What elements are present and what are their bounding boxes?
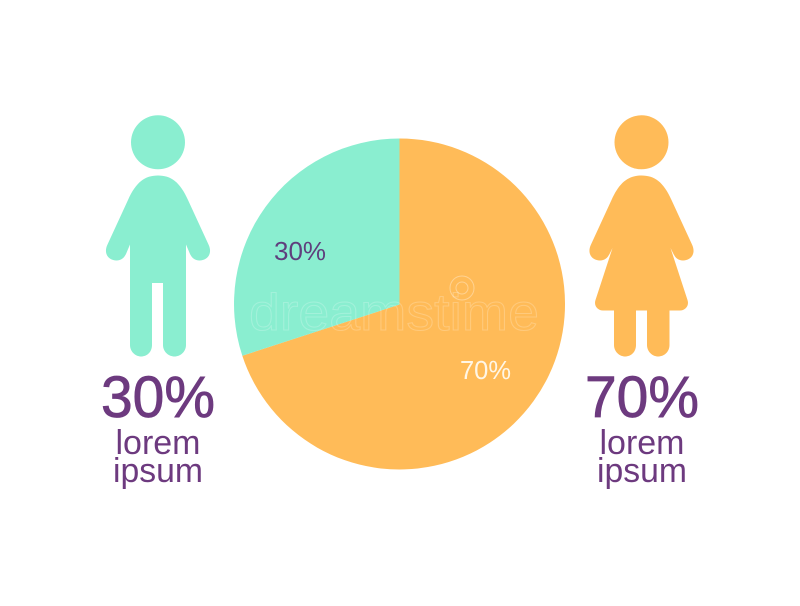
male figure bbox=[106, 115, 210, 356]
icon: male head bbox=[131, 115, 185, 169]
female percentage: 70% bbox=[585, 365, 699, 430]
male label line 2: ipsum bbox=[113, 452, 203, 490]
female label line 1: lorem bbox=[600, 424, 684, 462]
female stat text bbox=[585, 365, 699, 490]
male percentage: 30% bbox=[101, 365, 215, 430]
pie chart bbox=[234, 138, 565, 470]
pie label: 30%: 30% bbox=[274, 236, 326, 266]
pie label: 70%: 70% bbox=[460, 355, 511, 385]
icon: male body bbox=[106, 176, 210, 356]
pie slice: 70% bbox=[242, 138, 565, 470]
pie slice: 30% bbox=[234, 138, 400, 356]
female label line 2: ipsum bbox=[597, 452, 687, 490]
male label line 1: lorem bbox=[116, 424, 200, 462]
icon: female body bbox=[589, 176, 694, 356]
watermark spiral bbox=[450, 276, 474, 300]
icon: female head bbox=[614, 115, 668, 169]
male stat text bbox=[101, 365, 215, 490]
watermark wordmark: dreamstime bbox=[249, 284, 539, 342]
female figure bbox=[589, 115, 694, 356]
watermark bbox=[249, 276, 539, 342]
